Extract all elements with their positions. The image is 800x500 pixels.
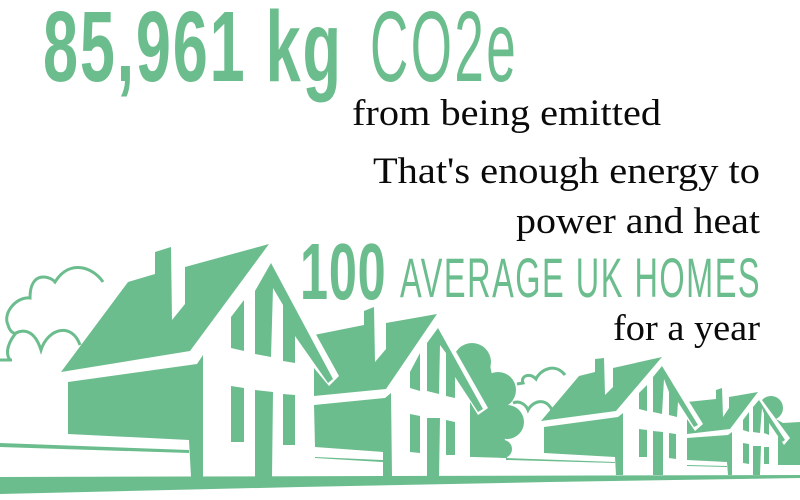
icon: bush centre <box>440 343 524 458</box>
ground <box>0 475 800 494</box>
house 3 <box>506 357 703 477</box>
house 2 <box>314 307 488 478</box>
heading: 100 average UK homes <box>300 227 760 317</box>
heading: 100 average UK homes: AVERAGE UK HOMES <box>400 247 760 309</box>
title: 85,961 kg CO2e <box>43 0 516 103</box>
icon: cloud outline left <box>0 268 103 360</box>
house 1 <box>0 244 339 477</box>
text: That's enough energy to: That's enough energy to <box>373 151 760 192</box>
icon: cloud outlines centre <box>513 368 565 410</box>
icon: bush right <box>759 396 800 465</box>
house 4 <box>687 388 790 477</box>
text: for a year: for a year <box>613 308 760 349</box>
illustration: row of houses <box>0 244 800 494</box>
heading: 100 average UK homes: 100 <box>300 227 386 317</box>
text: power and heat: power and heat <box>516 201 761 242</box>
text: from being emitted: from being emitted <box>352 93 662 134</box>
